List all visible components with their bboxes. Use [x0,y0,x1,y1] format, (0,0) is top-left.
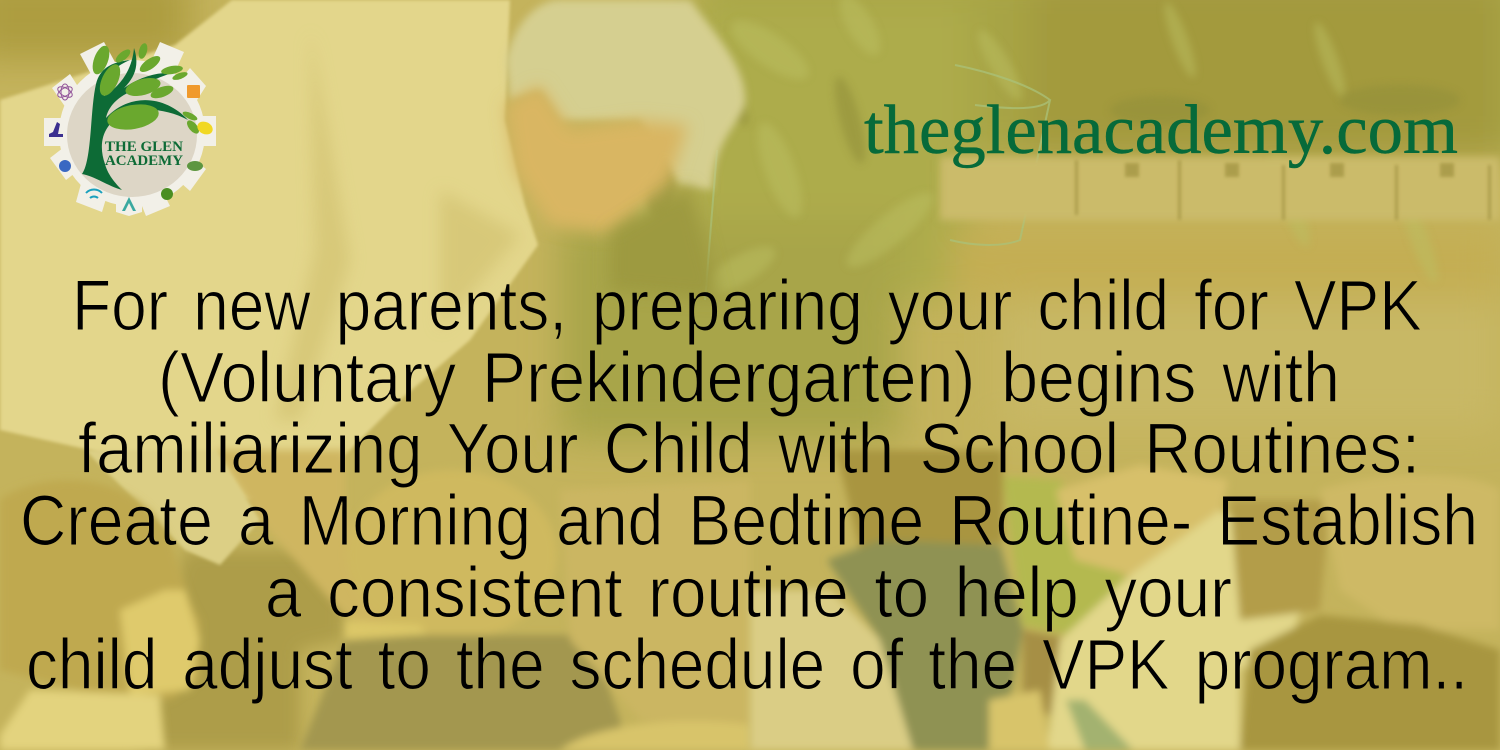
logo text: ACADEMY [105,153,183,169]
icon: calculator [187,85,200,98]
icon: theatre masks [187,161,203,171]
logo icons around the gear [49,84,215,211]
icon: wifi [86,190,102,198]
child: centre dark shirt and head [300,470,750,750]
wire plant cage [705,65,1050,300]
website URL: theglenacademy.com [864,92,1458,169]
logo: The Glen Academy [44,42,216,216]
shirt fold shadows [275,30,520,420]
main message text: (Voluntary Prekindergarten) begins with [158,339,1340,418]
cinder block wall [940,157,1500,220]
icon: lemon [195,119,215,137]
teacher sleeve and arm [85,450,412,750]
logo text: THE GLEN [105,139,183,155]
icon: microscope [49,122,63,137]
garden foliage [0,0,1500,440]
teacher head [505,0,745,300]
icon: atom [56,84,74,100]
child: right group [750,450,1500,750]
logo tree trunk and branches [82,48,188,190]
logo leaves [89,42,201,136]
main message text [20,267,1478,705]
icon: robot gear [161,188,173,200]
main message text: familiarizing Your Child with School Routines: [78,410,1420,489]
teacher shirt [0,0,538,500]
logo inner disc [67,73,197,197]
icon: light bulb [59,160,71,172]
logo text [105,139,183,169]
child: left boy [0,480,200,750]
main message text: a consistent routine to help your [265,554,1232,633]
logo gear outline [44,42,216,216]
children group [0,450,1500,750]
icon: compass [122,197,136,211]
